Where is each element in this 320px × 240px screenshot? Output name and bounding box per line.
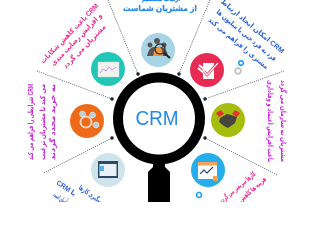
- text: magenta left: می کند تا مشتریان ترغیب: [39, 84, 47, 160]
- CRM label: CRM: [136, 108, 178, 130]
- text: pink top-left: و افزایش رضایت مندی: [50, 12, 104, 68]
- text: pink bottom-right: [217, 169, 268, 205]
- text: magenta right: مشتریان به سازمان می گردد: [279, 80, 288, 162]
- icon: orange gears: [70, 104, 104, 138]
- magnifier ring: [118, 78, 200, 160]
- connector end dots: [110, 72, 207, 140]
- icon: small blue gear: [196, 192, 202, 198]
- magnifier handle: [148, 160, 170, 202]
- icon: gears: [235, 61, 243, 74]
- text: blue bottom-left: با CRM: [55, 180, 77, 198]
- text: blue top-right: فرد به فرد حتی با میلیون ها: [215, 9, 278, 63]
- icon: teal chart: [91, 52, 125, 86]
- icon: handshake: [211, 103, 245, 137]
- text: magenta right: [266, 80, 288, 162]
- icon: blue chart: [191, 153, 225, 187]
- text: blue bottom-left: [52, 180, 104, 206]
- text: blue top-right: CRM امکان ایجاد ارتباط: [219, 0, 286, 55]
- icon: light-blue dashboard: [91, 153, 125, 187]
- dotted connector lines: [37, 0, 284, 175]
- text: top: [123, 0, 197, 13]
- icon: red check: [190, 53, 224, 87]
- text: magenta right: باعث افزایش اعتماد و وفاداری: [266, 80, 273, 162]
- text: magenta left: به خرید مجدد گردند: [48, 84, 57, 160]
- text: magenta left: [27, 84, 57, 160]
- text: blue top-right: مشتری را فراهم می کند: [207, 16, 270, 71]
- text: magenta left: CRM شرایطی را فراهم می کند: [27, 84, 35, 160]
- text: top: از مشتریان شماست: [123, 4, 197, 13]
- icon: search people: [141, 33, 175, 67]
- text: pink top-left: CRM باعث کاهش شکایات: [39, 2, 100, 65]
- text: pink top-left: مشتریان می گردد: [61, 22, 108, 70]
